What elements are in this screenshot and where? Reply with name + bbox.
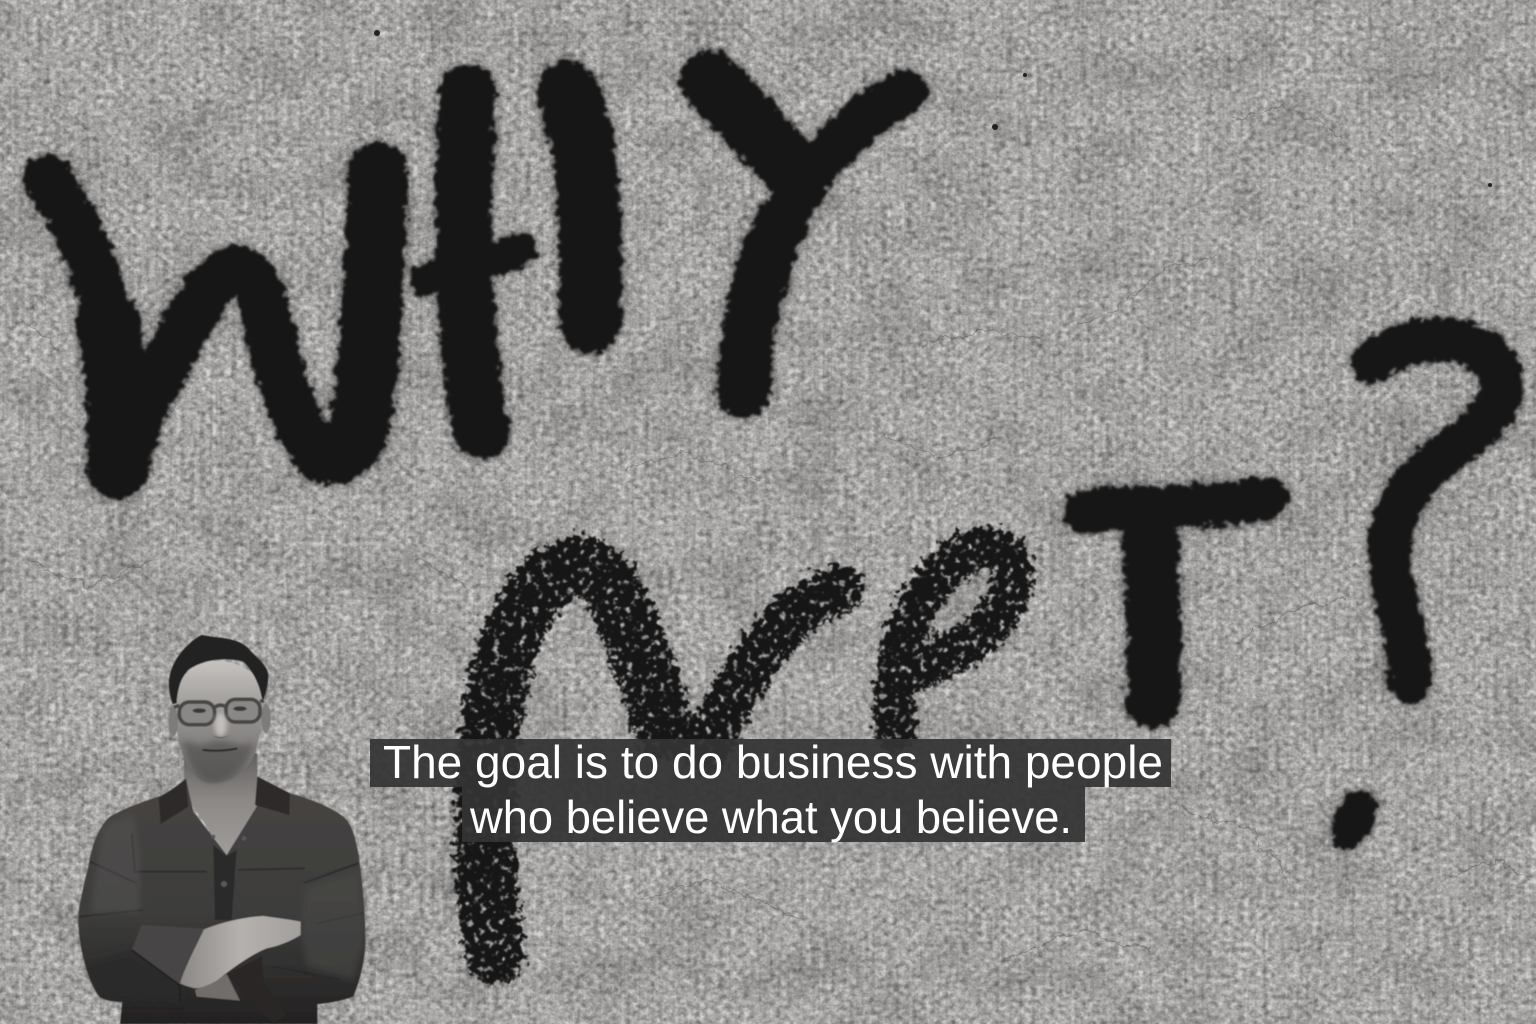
wall specks bbox=[374, 30, 1492, 187]
caption background line 1 bbox=[370, 739, 1171, 787]
shoulder highlight bbox=[90, 813, 140, 913]
caption text line 2: who believe what you believe. bbox=[469, 791, 1072, 843]
caption bbox=[370, 736, 1171, 843]
right sleeve cuff bbox=[227, 956, 286, 1023]
crossed arm: sleeve left bbox=[132, 925, 205, 985]
crossed arm: cuff bbox=[132, 950, 181, 1003]
glasses bbox=[174, 699, 264, 725]
portrait: man with glasses and crossed arms bbox=[78, 635, 365, 1024]
neck bbox=[184, 747, 257, 855]
caption background line 2 bbox=[462, 787, 1085, 842]
ears bbox=[169, 704, 271, 736]
nose bbox=[212, 713, 229, 738]
shirt bbox=[78, 777, 365, 1024]
hair bbox=[169, 635, 268, 704]
caption text line 1: The goal is to do business with people bbox=[383, 736, 1163, 788]
lower forearm bbox=[195, 974, 240, 1001]
right arm shading bbox=[301, 870, 365, 980]
eyes bbox=[193, 706, 247, 713]
mouth bbox=[203, 749, 237, 751]
head bbox=[176, 661, 262, 783]
graffiti word: Why bbox=[48, 80, 905, 468]
beard shadow bbox=[182, 740, 255, 782]
crossed arm: dark lower sleeve bbox=[83, 948, 182, 1003]
collar bbox=[159, 777, 290, 824]
crossed arm: light forearm bbox=[180, 916, 301, 988]
shirt folds bbox=[80, 833, 363, 979]
graffiti word: not bbox=[484, 549, 1013, 955]
shirt placket and buttons bbox=[211, 835, 246, 920]
